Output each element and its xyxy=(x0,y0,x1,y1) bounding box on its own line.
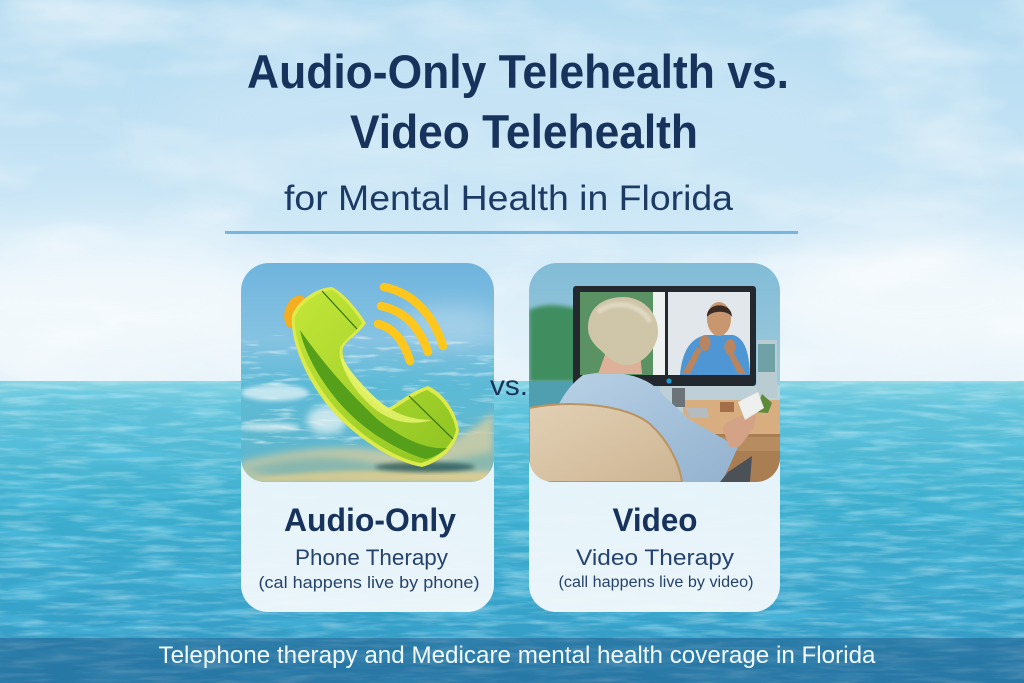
vs. label: vs. xyxy=(490,370,528,401)
note: call by phone: (cal happens live by phone) xyxy=(258,573,480,592)
person on screen xyxy=(680,335,750,375)
monitor xyxy=(573,286,756,386)
panel: audio-only xyxy=(240,263,500,612)
background: sea xyxy=(0,381,1024,683)
label: Video Therapy: Video Therapy xyxy=(576,545,734,570)
icon: sound waves xyxy=(378,287,443,361)
image: green phone on beach xyxy=(240,263,500,482)
chair xyxy=(529,404,682,482)
icon: phone handset xyxy=(280,287,459,467)
card background: video xyxy=(529,263,780,612)
label: Audio-Only: Audio-Only xyxy=(284,502,456,538)
desk xyxy=(683,400,780,434)
label: Video: Video xyxy=(612,502,698,538)
subtitle: for Mental Health in Florida xyxy=(284,179,734,218)
card background: audio-only xyxy=(241,263,494,612)
panel: video xyxy=(529,263,780,612)
image: video session xyxy=(529,263,780,482)
label: Phone Therapy: Phone Therapy xyxy=(295,545,448,570)
title xyxy=(247,45,789,158)
footer text: Telephone therapy and Medicare mental health coverage in Florida xyxy=(158,642,876,669)
woman seen from behind xyxy=(558,371,738,482)
title: Audio-Only Telehealth vs. xyxy=(247,45,789,98)
footer banner xyxy=(0,638,1024,683)
background: sky xyxy=(0,0,1024,382)
title: Video Telehealth xyxy=(350,105,698,158)
note: call by video: (call happens live by video) xyxy=(558,574,754,591)
